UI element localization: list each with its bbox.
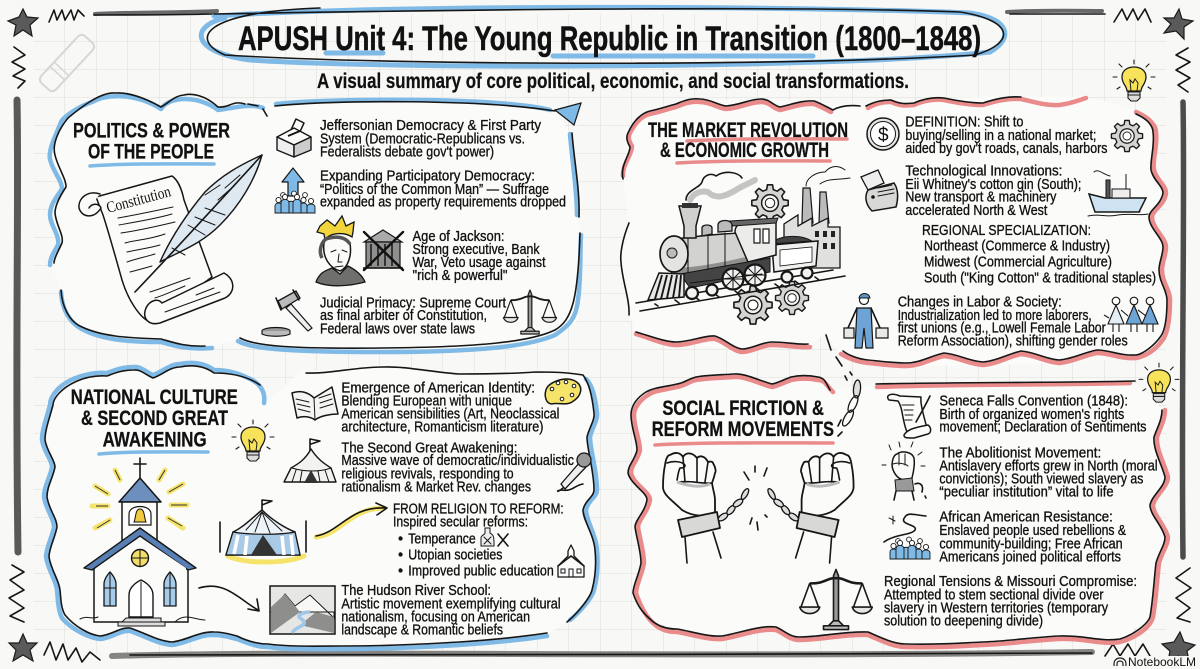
text: African American resistance: Enslaved people used rebellions & (939, 523, 1126, 539)
icon: church (80, 458, 205, 626)
text: labor and society: first unions (e.g., Lowell Female Labor (898, 321, 1106, 337)
text: age of Jackson (412, 229, 546, 284)
text: Jeffersonian democracy: Federalists debate gov't power) (320, 145, 494, 161)
icon: breaking shackled fists (663, 453, 854, 563)
icon: gear (1111, 120, 1143, 152)
icon: paint palette (545, 379, 581, 404)
factory (784, 166, 850, 268)
text: technological innovations: Eii Whitney's cotton gin (South); (905, 177, 1081, 193)
text: American identity: Blending European with unique (341, 394, 512, 410)
text: abolitionist movement: The Abolitionist Movement: (939, 445, 1101, 461)
text: Hudson River School (341, 583, 561, 638)
text: judicial primacy: as final arbiter of Constitution, (320, 308, 487, 324)
heading: REFORM MOVEMENTS (652, 417, 834, 441)
text: American identity: Emergence of American Identity: (341, 380, 535, 396)
icon: open book (292, 387, 338, 420)
text: Seneca Falls: movement; Declaration of Sentiments (939, 420, 1146, 436)
text: abolitionist movement: Antislavery efforts grew in North (moral (939, 459, 1158, 475)
icon: light bulb (232, 420, 274, 461)
text: regional specialization: South ("King Cotton" & traditional staples) (924, 271, 1156, 287)
text: age of Jackson: Strong executive, Bank (412, 242, 540, 258)
domes (702, 220, 732, 236)
text: religion to reform: • (398, 531, 403, 547)
icon: factory worker (844, 294, 888, 348)
text: labor and society: Industrialization led to more laborers, (898, 308, 1092, 324)
text: African American resistance: community-building; Free African (939, 536, 1123, 552)
text: abolitionist movement (939, 445, 1158, 501)
heading: POLITICS & POWER (73, 118, 230, 142)
text: labor and society (898, 295, 1128, 350)
text: regional specialization: REGIONAL SPECIALIZATION: (922, 223, 1091, 239)
gears (752, 185, 788, 221)
text: African American resistance: Americans joined political efforts (939, 550, 1121, 566)
text: regional specialization (922, 223, 1156, 287)
icon: voters and up arrow (275, 168, 315, 213)
text: Seneca Falls (939, 394, 1146, 436)
heading: & ECONOMIC GROWTH (660, 138, 829, 162)
text: religion to reform: Inspired secular reforms: (393, 515, 528, 531)
arrow: church to landscape (199, 586, 259, 611)
smoke (686, 172, 755, 200)
text: regional tensions: solution to deepening divide) (884, 613, 1043, 629)
text: regional tensions (884, 574, 1137, 629)
icon: scales of justice (503, 290, 557, 334)
icon: crossed-out bank (363, 230, 403, 270)
icon: crossed bottle (481, 528, 508, 546)
tender (772, 241, 818, 272)
text: Seneca Falls: Seneca Falls Convention (1848): (939, 394, 1128, 410)
icon: broken chain (838, 372, 861, 436)
icon: light bulb top right (1113, 60, 1155, 101)
text: age of Jackson: War, Veto usage against (412, 255, 546, 271)
text: Hudson River School: landscape & Romantic beliefs (341, 622, 503, 638)
text: religion to reform: • (398, 563, 403, 579)
sparks (744, 466, 767, 530)
icon: three women (1104, 297, 1158, 332)
icon: schoolhouse (558, 545, 584, 577)
panel: national culture (42, 363, 598, 649)
text: regional tensions: Regional Tensions & Missouri Compromise: (884, 574, 1137, 590)
text: judicial primacy: Judicial Primacy: Supreme Court (320, 295, 506, 311)
text: definition: buying/selling in a national market; (905, 128, 1096, 144)
text: religion to reform: FROM RELIGION TO REFORM: (393, 501, 564, 517)
heading: NATIONAL CULTURE (71, 385, 238, 409)
icon: locomotive with factory and gears (636, 166, 850, 324)
icon: landscape painting (270, 586, 335, 634)
heading: THE MARKET REVOLUTION (648, 118, 848, 142)
text: religion to reform: Utopian societies (408, 547, 502, 563)
icon: constitution scroll and quill: Constitution (105, 183, 173, 217)
text: participatory democracy (320, 168, 566, 211)
left fist (663, 453, 750, 563)
text: Jeffersonian democracy (320, 118, 542, 161)
text: regional specialization: Midwest (Commercial Agriculture) (924, 255, 1112, 271)
title banner (201, 7, 1005, 66)
subtitle: A visual summary of core political, economic, and social transformations. (317, 70, 909, 93)
text: American identity: American sensibilities (Art, Neoclassical (341, 406, 559, 422)
heading: OF THE PEOPLE (88, 140, 214, 164)
frame and wheels (680, 258, 770, 288)
icon: constitution scroll and quill (79, 155, 262, 324)
icon: gavel (262, 290, 312, 336)
text: labor and society: Changes in Labor & Society: (898, 295, 1062, 311)
boiler (668, 233, 752, 274)
text: Jeffersonian democracy: System (Democratic-Republicans vs. (320, 131, 525, 147)
heading (648, 118, 848, 163)
text: second great awakening: The Second Great Awakening: (341, 440, 517, 456)
heading: & SECOND GREAT (81, 406, 228, 430)
text: second great awakening: Massive wave of democratic/individualistic (341, 453, 574, 469)
text: second great awakening (341, 440, 574, 496)
icon: road and community (884, 514, 930, 559)
text: technological innovations: Technological Innovations: (905, 164, 1062, 180)
text: regional tensions: slavery in Western territories (temporary (884, 601, 1109, 617)
icon: raised fist with broken shackle (882, 442, 926, 500)
text: judicial primacy: Federal laws over state laws (320, 321, 475, 337)
text: technological innovations: New transport & machinery (905, 190, 1057, 206)
cowcatcher (648, 273, 684, 300)
icon: dollar coin: $ (878, 125, 889, 146)
panel: politics and power (50, 93, 581, 352)
title text: APUSH Unit 4: The Young Republic in Transition (1800–1848) (238, 20, 981, 58)
text: definition: DEFINITION: Shift to (905, 115, 1023, 131)
panel: social friction (628, 372, 1168, 647)
watermark: NotebookLM: NotebookLM (1128, 655, 1196, 669)
text: African American resistance: African American Resistance: (939, 510, 1113, 526)
cab (735, 221, 776, 262)
text: age of Jackson: Age of Jackson: (412, 229, 504, 245)
text: age of Jackson: "rich & powerful" (412, 268, 508, 284)
text: African American resistance (939, 510, 1126, 566)
icon: small tent (284, 439, 336, 483)
text: participatory democracy: “Politics of the Common Man” — Suffrage (320, 182, 549, 198)
text: definition (905, 115, 1107, 157)
text: Hudson River School: Artistic movement exemplifying cultural (341, 597, 561, 613)
heading (73, 118, 230, 166)
icon: small scroll and pen (888, 394, 931, 438)
text: Hudson River School: nationalism, focusing on American (341, 610, 530, 626)
heading: SOCIAL FRICTION & (662, 396, 824, 420)
text: religion to reform: Improved public education (408, 563, 554, 579)
text: second great awakening: religious revivals, responding to (341, 467, 514, 483)
text: labor and society: Reform Association), shifting gender roles (898, 334, 1128, 350)
heading (71, 385, 238, 454)
text: definition: aided by gov't roads, canals, harbors (905, 141, 1107, 157)
text: Seneca Falls: Birth of organized women's rights (939, 407, 1124, 423)
text: abolitionist movement: convictions); South viewed slavery as (939, 471, 1143, 487)
text: American identity: architecture, Romanticism literature) (341, 420, 543, 436)
icon: dollar coin (867, 118, 899, 150)
panel: market revolution (621, 97, 1170, 366)
text: judicial primacy (320, 295, 506, 337)
text: American identity (341, 380, 559, 436)
icon: cotton gin (861, 170, 898, 211)
heading: AWAKENING (103, 428, 207, 452)
text: participatory democracy: Expanding Participatory Democracy: (320, 168, 535, 184)
text: Hudson River School: The Hudson River School: (341, 583, 491, 599)
text: technological innovations (905, 164, 1081, 219)
icon: ballot box (277, 119, 311, 157)
text: religion to reform (393, 501, 564, 579)
arrow: tent to reform (316, 503, 387, 537)
text: technological innovations: accelerated North & West (905, 203, 1047, 219)
icon: steamboat (1088, 171, 1148, 216)
text: religion to reform: • (398, 547, 403, 563)
icon: revival tent (220, 500, 306, 562)
text: Jeffersonian democracy: Jeffersonian Democracy & First Party (320, 118, 542, 134)
icon: light bulb bottom right (1139, 363, 1179, 402)
heading (652, 396, 834, 445)
text: regional tensions: Attempted to stem sectional divide over (884, 587, 1104, 603)
text: religion to reform: Temperance (408, 531, 476, 547)
icon: microphone (558, 453, 591, 491)
icon: scales (800, 570, 872, 630)
icon: Andrew Jackson portrait with crown (316, 216, 365, 286)
track (636, 270, 845, 311)
text: participatory democracy: expanded as property requirements dropped (320, 195, 566, 211)
text: regional specialization: Northeast (Commerce & Industry) (924, 239, 1110, 255)
right fist (766, 453, 854, 563)
text: second great awakening: rationalism & Market Rev. changes (341, 480, 531, 496)
text: abolitionist movement: “peculiar institution” vital to life (939, 485, 1114, 501)
smokestack (679, 206, 701, 238)
